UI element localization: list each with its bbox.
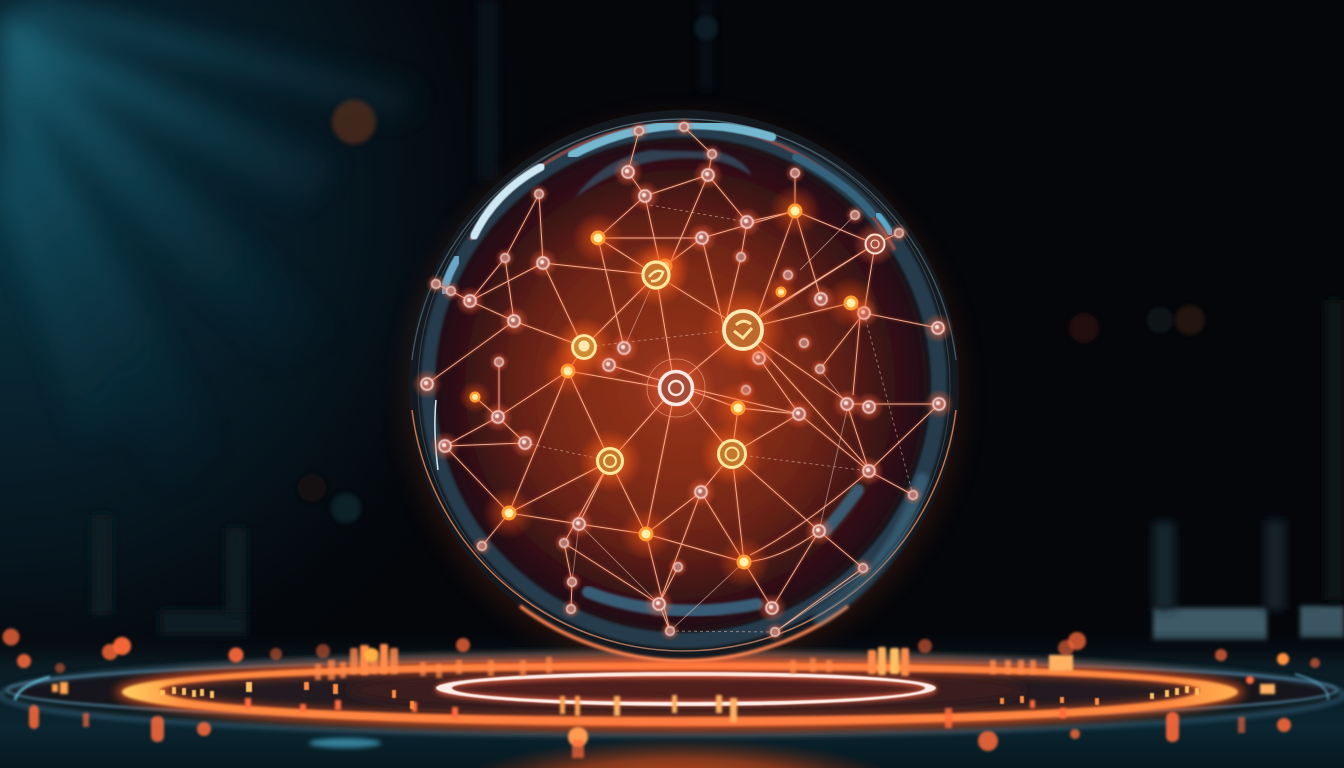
sphere: reddish inner edge <box>470 124 895 250</box>
hub node: upper <box>624 243 688 307</box>
orange ring <box>116 656 1244 731</box>
small network nodes <box>412 117 954 642</box>
network links: orange glow <box>427 127 939 632</box>
white inner ring <box>436 672 936 706</box>
floor: red disc inside the rings <box>140 666 1220 714</box>
network links <box>427 127 939 632</box>
background: teal haze at left <box>0 0 700 700</box>
glowing orange nodes <box>459 185 877 588</box>
floor <box>0 630 1344 768</box>
glass sphere <box>406 110 962 673</box>
floor: orange reflection at bottom centre <box>450 738 910 768</box>
sphere: glass shell <box>409 110 959 660</box>
sphere: top grey rim <box>412 119 956 360</box>
hub node: top right white ring <box>853 222 897 266</box>
sphere: secondary glass line <box>418 119 950 651</box>
sphere: outer orange halo <box>406 117 962 673</box>
background: blurred vertical columns and blocks <box>92 0 1344 640</box>
hub node: lower right <box>700 422 764 486</box>
hub node: large right <box>701 288 785 372</box>
sphere: thin side and bottom orange rim <box>412 410 956 651</box>
sphere: red interior <box>435 138 929 632</box>
highlight: lower blue reflection <box>588 592 757 611</box>
highlight: small left arc <box>443 258 458 292</box>
outer platform disc <box>0 648 1344 736</box>
highlight: thin left glint <box>435 400 438 470</box>
highlight: top arc <box>572 125 772 155</box>
sphere: bright bottom rim <box>520 606 848 661</box>
equalizer bars on the orange ring <box>315 644 1073 680</box>
background: bokeh lights <box>298 16 1205 523</box>
sphere: blue inner band <box>429 130 939 640</box>
highlight: top right arcs <box>796 157 872 214</box>
hub node: left <box>554 317 614 377</box>
light rays from top left <box>0 0 420 510</box>
highlight: outer lower right sheen <box>820 480 922 618</box>
highlight: upper inner reflection <box>575 150 752 198</box>
sphere: warm glow around hubs <box>500 210 840 570</box>
bokeh dots above and around the rings <box>2 628 1320 758</box>
hub node: lower left <box>578 429 642 493</box>
highlight: lower right reflection <box>826 490 858 530</box>
floor: teal light streak <box>309 738 381 748</box>
hub node: centre white ring <box>638 350 714 426</box>
faint and dashed links <box>525 205 913 632</box>
highlight: bright left arc <box>474 167 541 236</box>
small sparkling lights inside the orange ring <box>160 682 1199 709</box>
